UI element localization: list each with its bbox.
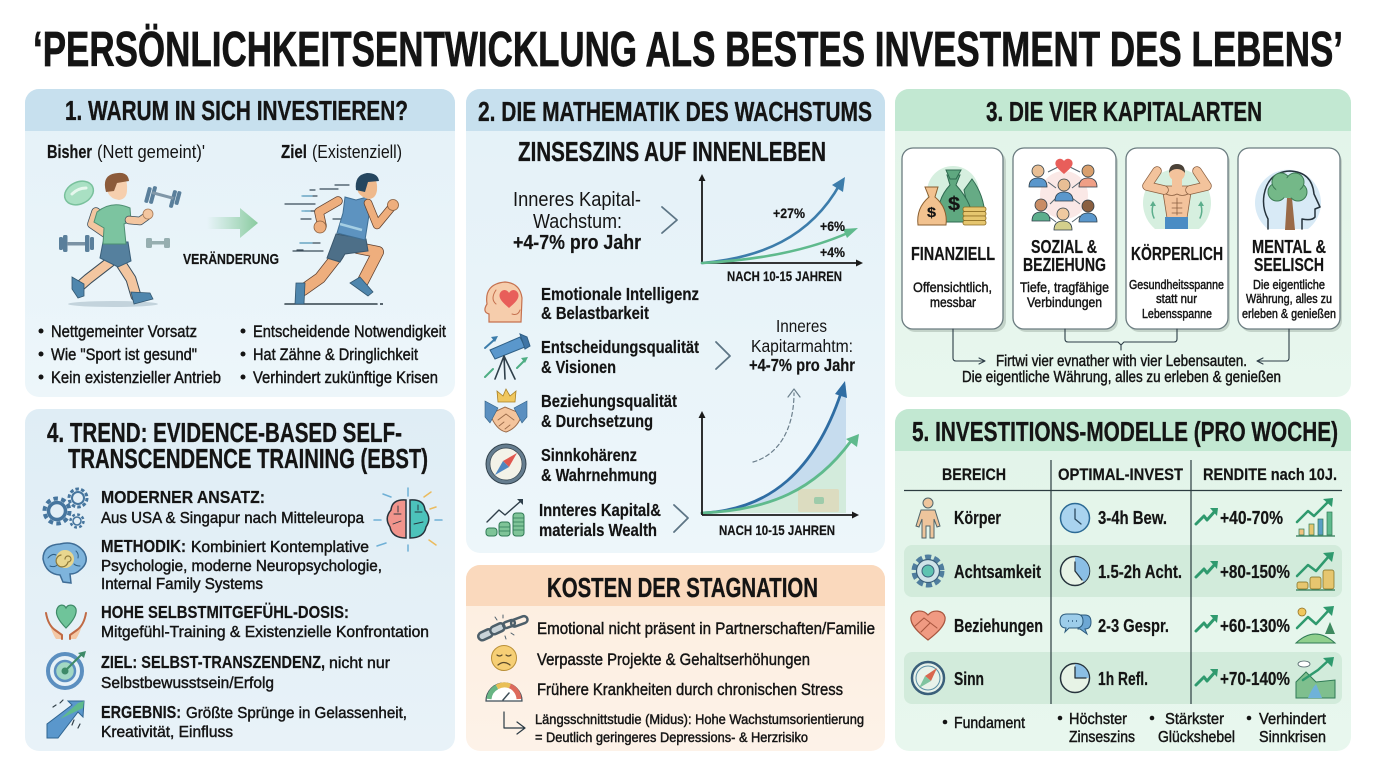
card: körperlich: KÖRPERLICH (1131, 244, 1223, 264)
text: emotionale intelligenz: & Belastbarkeit (541, 303, 649, 323)
text: ergebnis (101, 702, 407, 741)
row: sinn: +70-140% (1220, 669, 1290, 689)
text: studie: Längsschnittstudie (Midus): Hohe Wachstumsorientierung (535, 711, 864, 727)
text: beziehungsqualität (541, 391, 677, 431)
text: sinnkohärenz: & Wahrnehmung (541, 465, 657, 485)
text: moderner ansatz: MODERNER ANSATZ: (101, 487, 265, 507)
text: beziehungsqualität: & Durchsetzung (541, 411, 653, 431)
arrow: chevron (716, 342, 730, 369)
bullets: bisher: Nettgemeinter Vorsatz (51, 322, 197, 341)
text: emotionale intelligenz: Emotionale Intelligenz (541, 284, 699, 304)
row: achtsamkeit: Achtsamkeit (954, 562, 1041, 582)
panel: 5 investitions-modelle (895, 409, 1351, 751)
icon: broken chain (477, 615, 528, 642)
card: mental: erleben & genießen (1242, 306, 1336, 321)
text: wachstum: Inneres Kapital- (513, 188, 641, 211)
icon: handshake with crown (485, 389, 527, 432)
card: sozial: Tiefe, tragfähige (1020, 279, 1109, 295)
card: finanziell: FINANZIELL (911, 244, 995, 264)
heading: 3. DIE VIER KAPITALARTEN (986, 96, 1262, 127)
text: selbstmitgefühl: HOHE SELBSTMITGEFÜHL-DOSIS: (101, 602, 349, 622)
heading: 2. DIE MATHEMATIK DES WACHSTUMS (478, 96, 872, 127)
text: emotionale intelligenz (541, 284, 699, 323)
icon: heart in hands (46, 605, 86, 639)
icon: gears (44, 489, 87, 528)
table footer notes: Sinnkrisen (1259, 729, 1326, 746)
label: bisher: (Nett gemeint)' (97, 141, 205, 162)
panel: 1 warum in sich investieren (25, 89, 455, 397)
row: sinn: 1h Refl. (1098, 669, 1148, 689)
card: sozial (1013, 148, 1118, 332)
table footer notes: Fundament (954, 715, 1025, 732)
bullets: ziel: Hat Zähne & Dringlichkeit (253, 345, 418, 364)
bullets: ziel: Verhindert zukünftige Krisen (253, 368, 438, 387)
card: mental: MENTAL & (1252, 237, 1326, 257)
table header: BEREICH (942, 465, 1006, 484)
arrow: veränderung (207, 208, 258, 238)
icon: determined sprinter (285, 173, 398, 304)
subheading: ZINSESZINS AUF INNENLEBEN (518, 136, 826, 167)
arrow: chevron (674, 505, 688, 532)
text: selbstmitgefühl: Mitgefühl-Training & Existenzielle Konfrontation (101, 624, 429, 641)
card: körperlich: statt nur (1156, 291, 1198, 306)
text: beziehungsqualität: Beziehungsqualität (541, 391, 677, 411)
card: mental: Die eigentliche (1253, 277, 1325, 292)
text: ziel: Selbstbewusstsein/Erfolg (101, 675, 274, 692)
card: mental: Währung, alles zu (1246, 291, 1332, 306)
text: ergebnis: Kreativität, Einfluss (101, 724, 233, 741)
text: ziel (101, 652, 391, 692)
text: studie: = Deutlich geringeres Depressions- & Herzrisiko (535, 729, 808, 745)
text: verpasste: Verpasste Projekte & Gehaltserhöhungen (537, 650, 810, 669)
chart: zinseszins curves: +4% (820, 244, 845, 260)
label: bisher: Bisher (47, 141, 92, 162)
text: ergebnis: ERGEBNIS: (101, 702, 181, 722)
text: kapital: Inneres (776, 316, 827, 336)
table footer notes (943, 711, 1327, 746)
panel: 3 die vier kapitalarten (895, 89, 1351, 397)
text: selbstmitgefühl (101, 602, 429, 641)
heading: KOSTEN DER STAGNATION (547, 572, 818, 603)
text: summary: Die eigentliche Währung, alles zu erleben & genießen (962, 369, 1281, 386)
text: entscheidungsqualität: & Visionen (541, 357, 616, 377)
text: summary: Firtwi vier evnather with vier Lebensauten. (996, 353, 1247, 370)
label: ziel: Ziel (281, 141, 307, 162)
table footer notes: Höchster (1069, 711, 1128, 728)
text: moderner ansatz: Aus USA & Singapur nach Mitteleuropa (101, 510, 364, 527)
bullets: bisher: Wie "Sport ist gesund" (51, 345, 197, 364)
bullets: bisher (38, 322, 221, 387)
chart: zinseszins curves: NACH 10-15 JAHREN (727, 268, 842, 284)
table header: OPTIMAL-INVEST (1058, 465, 1184, 484)
row: sinn (912, 657, 1335, 698)
chart: zinseszins curves: +6% (820, 218, 845, 234)
label: ziel: (Existenziell) (312, 141, 402, 162)
text: kapital: Kapitarmahtm: (751, 336, 853, 356)
text: kapital: +4-7% pro Jahr (749, 355, 855, 375)
text: frühere krankheiten: Frühere Krankheiten durch chronischen Stress (537, 680, 843, 699)
text: sinnkohärenz: Sinnkohärenz (541, 445, 637, 465)
icon: growth arrow (47, 700, 84, 738)
table header (942, 465, 1337, 484)
card: mental (1238, 148, 1342, 332)
arrows: card connectors (953, 329, 1289, 364)
arrow: elbow (504, 712, 525, 734)
bullets: bisher: Kein existenzieller Antrieb (51, 368, 221, 387)
row: beziehungen: 2-3 Gespr. (1098, 616, 1169, 636)
chart: wealth curves: NACH 10-15 JAHREN (719, 522, 835, 538)
card: finanziell: Offensichtlich, (913, 279, 992, 295)
icon: sad face (492, 646, 516, 670)
icon: target with arrow (48, 651, 86, 688)
panel: 4 trend ebst (25, 409, 455, 751)
text: wachstum: +4-7% pro Jahr (513, 231, 641, 254)
text: summary (962, 353, 1281, 386)
label: veränderung: VERÄNDERUNG (183, 251, 279, 268)
text: kapital (749, 316, 855, 375)
card: finanziell (902, 148, 1006, 332)
row: körper: 3-4h Bew. (1098, 508, 1167, 528)
card: körperlich: Lebensspanne (1142, 306, 1212, 321)
panel: 2 mathematik des wachstums (466, 89, 885, 553)
icon: compass (486, 444, 526, 484)
icon: head with heart (485, 282, 522, 322)
text: wachstum (513, 188, 641, 254)
card: finanziell: $ (927, 204, 936, 220)
card: finanziell: messbar (930, 294, 976, 310)
text: innteres kapital (539, 500, 661, 540)
text: ziel: ZIEL: SELBST-TRANSZENDENZ, (101, 652, 325, 672)
text: entscheidungsqualität: Entscheidungsqualität (541, 337, 699, 357)
text: sinnkohärenz (541, 445, 657, 485)
table footer notes: Zinseszins (1069, 729, 1135, 746)
card: sozial: BEZIEHUNG (1023, 255, 1106, 275)
card: finanziell: $ (948, 194, 960, 215)
table footer notes: Verhindert (1259, 711, 1327, 728)
table footer notes: Stärkster (1165, 711, 1225, 728)
icon: colorful brain (374, 488, 442, 551)
text: innteres kapital: Innteres Kapital& (539, 500, 661, 520)
text: methodik: Psychologie, moderne Neuropsychologie, (101, 558, 382, 575)
icon: telescope (485, 334, 530, 379)
icon: brain with spiral (43, 543, 86, 583)
text: ergebnis: Größte Sprünge in Gelassenheit, (186, 705, 407, 722)
card: sozial: SOZIAL & (1031, 237, 1097, 257)
table header: RENDITE nach 10J. (1203, 465, 1337, 484)
heading: 4. TREND: EVIDENCE-BASED SELF- (47, 417, 402, 448)
heading (47, 417, 428, 474)
card: sozial: Verbindungen (1027, 294, 1102, 310)
icon: casual runner with dumbbells (59, 173, 182, 307)
row: körper (916, 498, 1335, 538)
text: methodik (101, 536, 382, 593)
row: körper: +40-70% (1220, 508, 1283, 528)
chart: wealth curves (698, 381, 859, 538)
icon: coins with trend (486, 499, 524, 536)
text: wachstum: Wachstum: (533, 210, 622, 233)
row: achtsamkeit: +80-150% (1220, 562, 1290, 582)
heading: TRANSCENDENCE TRAINING (EBST) (68, 443, 428, 474)
card: körperlich: Gesundheitsspanne (1129, 277, 1224, 292)
text: studie (535, 711, 864, 745)
row: beziehungen: Beziehungen (954, 616, 1043, 636)
table footer notes: Glückshebel (1158, 729, 1235, 746)
text: innteres kapital: materials Wealth (539, 520, 657, 540)
table rows background (904, 545, 1342, 704)
text: methodik: Kombiniert Kontemplative (191, 539, 369, 556)
text: methodik: METHODIK: (101, 536, 186, 556)
panel: kosten der stagnation (466, 565, 885, 751)
bullets: ziel: Entscheidende Notwendigkeit (253, 322, 446, 341)
icon: stress gauge (486, 683, 522, 701)
text: ziel: nicht nur (329, 655, 391, 672)
row: beziehungen (911, 606, 1335, 643)
arrow: chevron (662, 207, 677, 233)
label: ziel (281, 141, 402, 162)
text: emotional: Emotional nicht präsent in Partnerschaften/Familie (537, 619, 875, 638)
heading: 1. WARUM IN SICH INVESTIEREN? (65, 95, 408, 126)
row: sinn: Sinn (954, 669, 984, 689)
row: beziehungen: +60-130% (1220, 616, 1290, 636)
chart: zinseszins curves: +27% (773, 205, 805, 221)
bullets: ziel (240, 322, 446, 387)
card: körperlich (1126, 148, 1230, 332)
chart: zinseszins curves (698, 174, 863, 284)
text: moderner ansatz (101, 487, 364, 527)
text: entscheidungsqualität (541, 337, 699, 377)
row: achtsamkeit (914, 552, 1335, 590)
row: körper: Körper (954, 508, 1001, 528)
text: methodik: Internal Family Systems (101, 576, 263, 593)
row: achtsamkeit: 1.5-2h Acht. (1098, 562, 1182, 582)
label: bisher (47, 141, 205, 162)
card: mental: SEELISCH (1254, 255, 1324, 275)
